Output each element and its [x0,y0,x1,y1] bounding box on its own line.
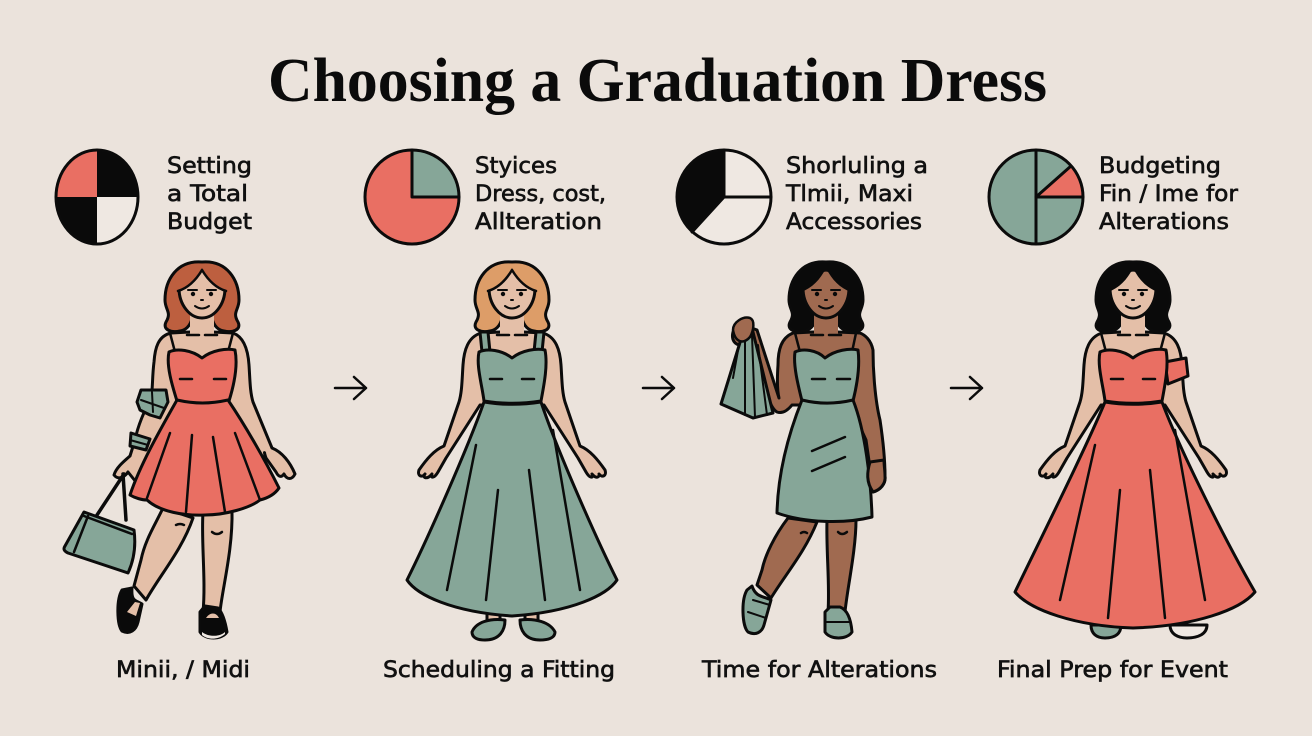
text block: step 3 label [785,154,928,235]
text block: step 4 label: Fin / Ime for [1099,182,1239,207]
text block: step 1 label [167,154,252,235]
text block: step 1 label: a Total [167,182,248,207]
green arm band and bracelet [137,390,168,418]
figure: woman in coral mini dress with bag [64,262,295,639]
upper body and arms [114,332,295,482]
panel: step 3 shortlisting [676,150,928,244]
text block: step 4 label: Alterations [1099,210,1229,235]
black shoes [118,588,142,632]
bag [64,474,135,573]
head [789,262,863,338]
head [475,262,549,338]
legs [757,518,817,598]
text block: step 2 label [475,154,606,235]
legs [134,508,193,600]
pie chart: step 3 [676,150,771,244]
arrow 2 [643,377,674,399]
caption: step 4: Final Prep for Event [997,658,1228,683]
text block: step 1 label: Setting [167,154,252,179]
upper body and arms [419,332,605,478]
figure: woman in coral long gown [1015,262,1255,638]
upper body and arms [1040,332,1226,478]
pie chart: step 1 [56,150,138,244]
feet [487,600,538,625]
feet [1091,625,1121,638]
green short dress [777,333,872,522]
green shoes [743,586,771,634]
caption: step 2: Scheduling a Fitting [383,658,615,683]
head [165,262,239,338]
pie chart: step 4 [989,150,1083,244]
coral gown [1015,333,1255,628]
text block: step 4 label [1099,154,1239,235]
text block: step 4 label: Budgeting [1099,154,1221,179]
text block: step 2 label: Styices [475,154,557,179]
caption: step 1: Minii, / Midi [116,658,250,683]
fabric in hand [721,318,773,418]
green dress [407,332,617,616]
body and arms [732,327,885,492]
title: Choosing a Graduation Dress [268,47,1047,115]
text block: step 3 label: Shorluling a [786,154,928,179]
pie chart: step 2 [365,150,459,244]
panel: step 2 styles [365,150,606,244]
panel: step 1 budget [56,150,252,244]
hand over skirt [868,460,885,492]
arrow 1 [335,377,366,399]
text block: step 2 label: Dress, cost, [475,182,606,207]
captions [116,658,1228,683]
arrow 3 [951,377,982,399]
coral dress [130,333,279,515]
text block: step 2 label: Allteration [475,210,602,235]
figure: woman in green short dress holding fabric [721,262,885,638]
coral arm band [1165,358,1188,384]
figure: woman in green long dress [407,262,617,640]
text block: step 1 label: Budget [167,210,252,235]
text block: step 3 label: Tlmii, Maxi [785,182,913,207]
head [1096,262,1170,338]
panel: step 4 budgeting [989,150,1239,244]
caption: step 3: Time for Alterations [701,658,937,683]
text block: step 3 label: Accessories [786,210,922,235]
